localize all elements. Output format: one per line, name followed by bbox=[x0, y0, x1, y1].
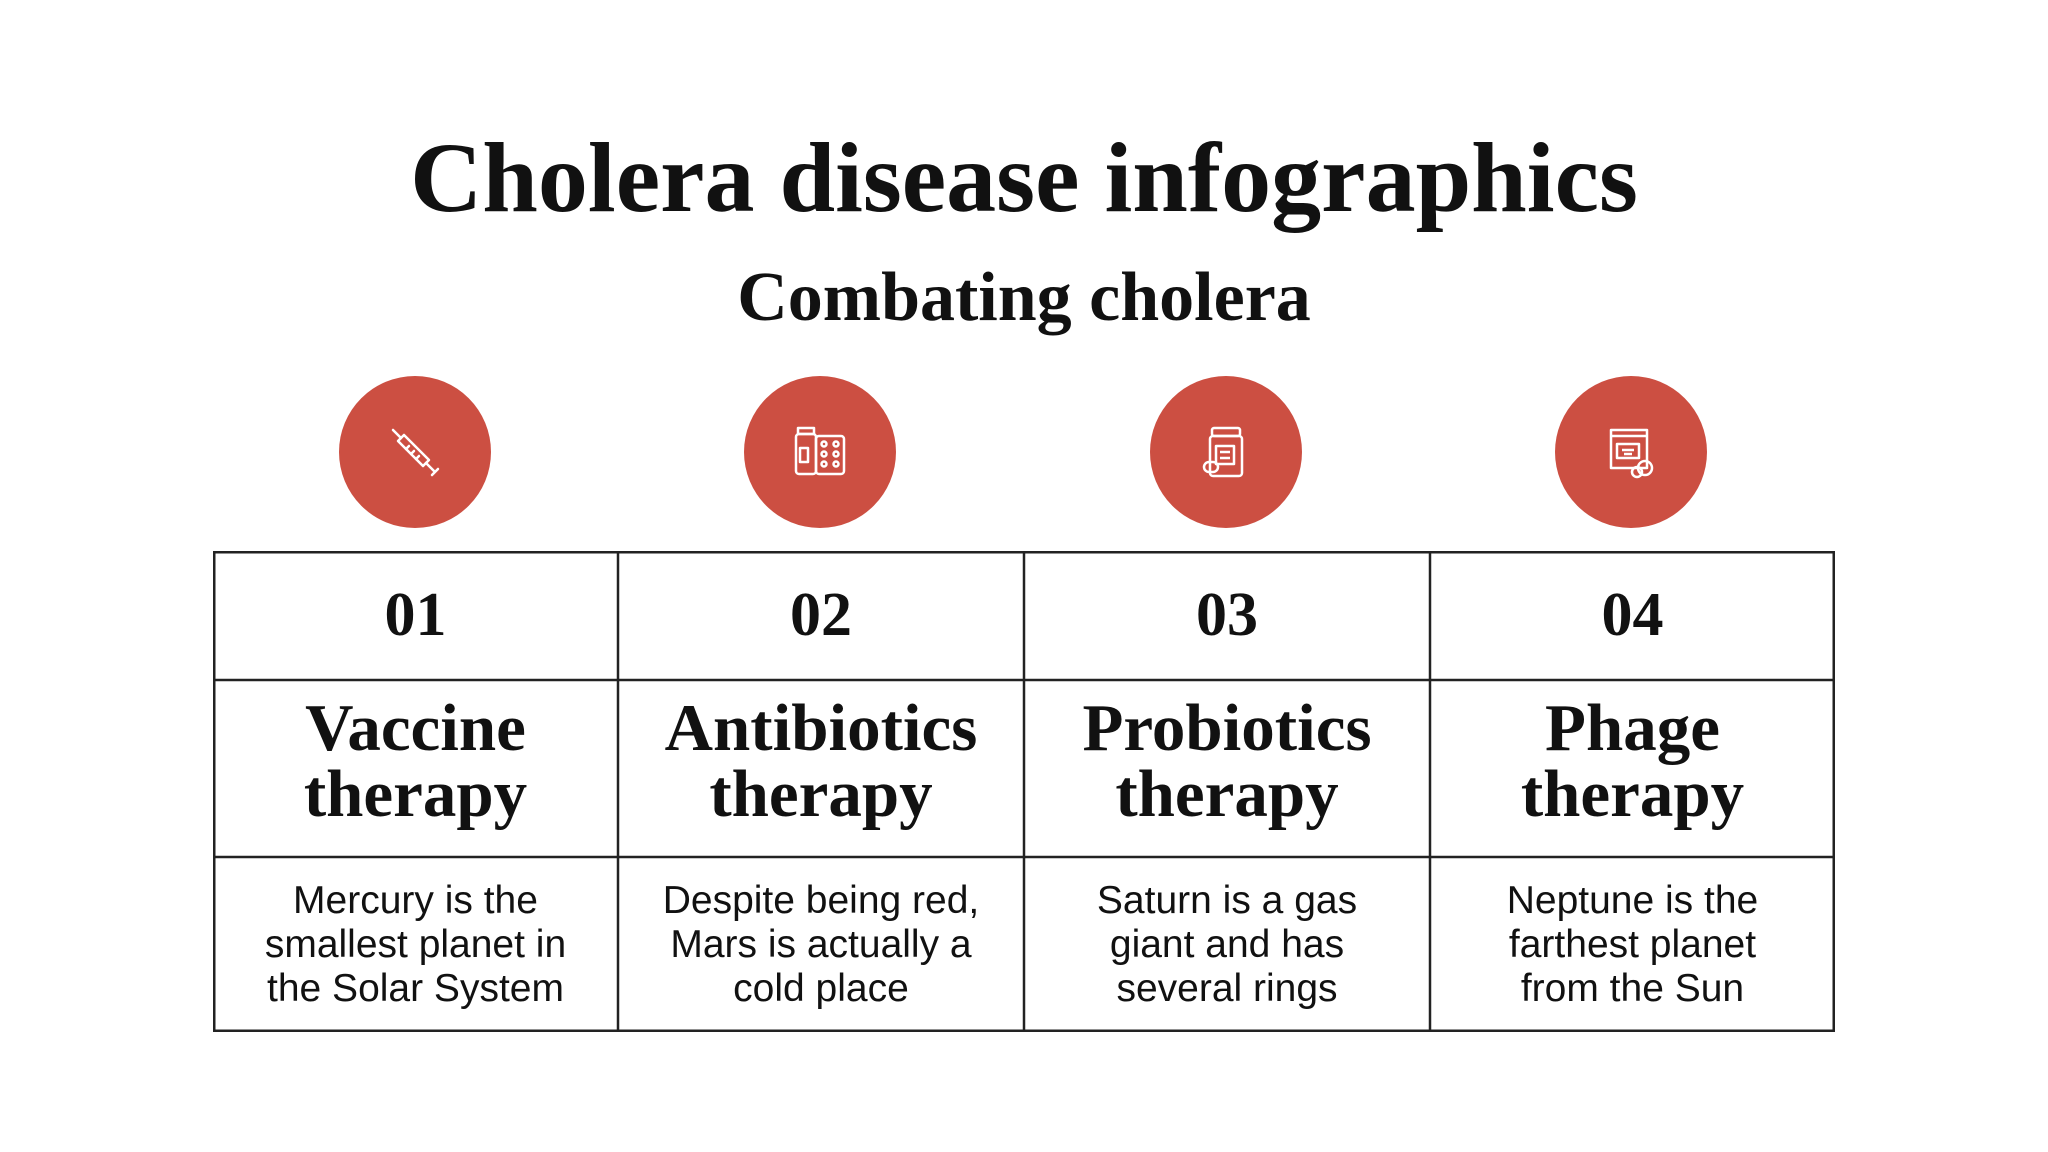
table: 03 bbox=[1196, 581, 1258, 649]
column 2 bbox=[663, 581, 979, 1010]
table: the Solar System bbox=[267, 966, 564, 1010]
table: therapy bbox=[1521, 756, 1744, 830]
table: farthest planet bbox=[1509, 922, 1756, 966]
table: Neptune is the bbox=[1507, 878, 1758, 922]
table: Phage bbox=[1545, 690, 1720, 764]
table: Mars is actually a bbox=[670, 922, 972, 966]
table: several rings bbox=[1116, 966, 1338, 1010]
table: Antibiotics bbox=[665, 690, 977, 764]
column 3 bbox=[1082, 581, 1372, 1010]
icon: probiotic bottle bbox=[1150, 376, 1302, 528]
table: therapy bbox=[709, 756, 933, 830]
table: from the Sun bbox=[1521, 966, 1744, 1010]
icon: sachet bbox=[1555, 376, 1707, 528]
table: smallest planet in bbox=[265, 922, 566, 966]
table: Saturn is a gas bbox=[1097, 878, 1357, 922]
title: Cholera disease infographics bbox=[410, 122, 1638, 233]
table: Despite being red, bbox=[663, 878, 979, 922]
icon: syringe bbox=[339, 376, 491, 528]
table: Vaccine bbox=[305, 690, 526, 764]
subtitle: Combating cholera bbox=[737, 259, 1311, 336]
table: 01 bbox=[384, 581, 446, 649]
column 4 bbox=[1507, 581, 1758, 1010]
table: 02 bbox=[790, 581, 852, 649]
table: giant and has bbox=[1110, 922, 1344, 966]
table: therapy bbox=[1115, 756, 1339, 830]
table: Probiotics bbox=[1082, 690, 1372, 764]
table: Mercury is the bbox=[293, 878, 538, 922]
table: 04 bbox=[1602, 581, 1664, 649]
table bbox=[213, 551, 1835, 1032]
column 1 bbox=[265, 581, 566, 1010]
icon: pill bottle and blister pack bbox=[744, 376, 896, 528]
table: cold place bbox=[733, 966, 909, 1010]
table: therapy bbox=[304, 756, 527, 830]
